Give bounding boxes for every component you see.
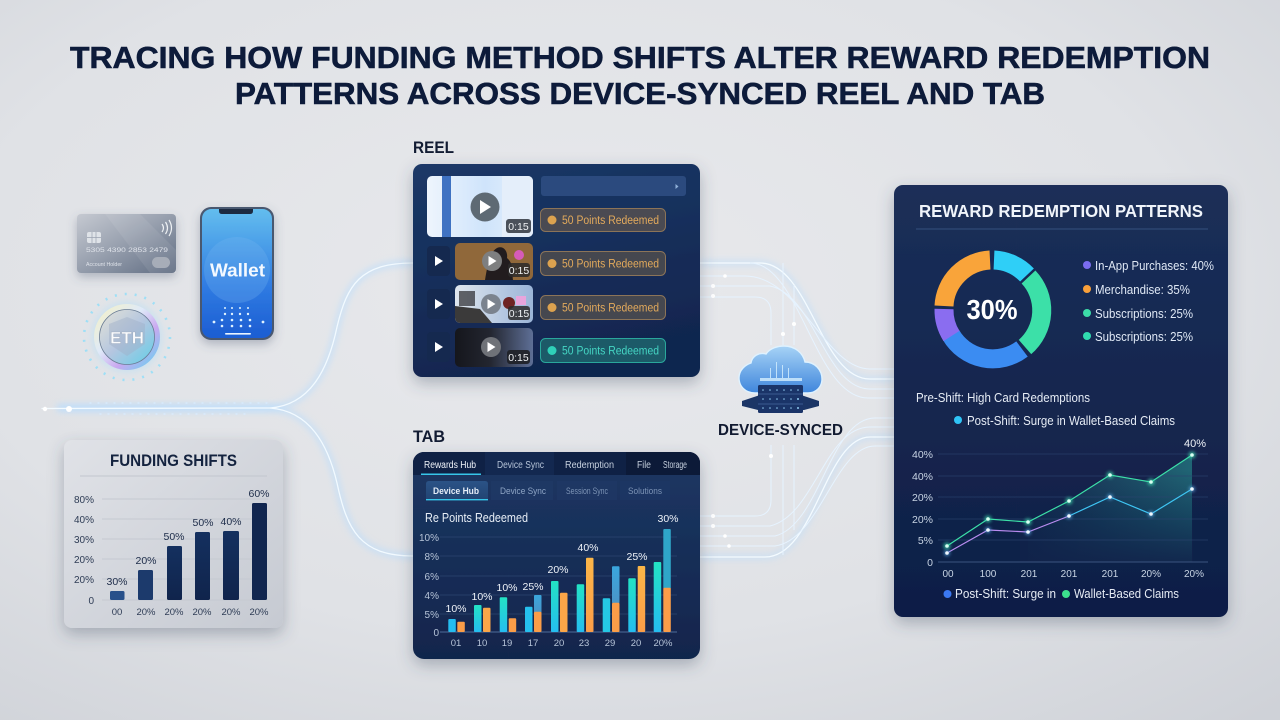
- legend: line chart: [944, 586, 1179, 601]
- bar chart: funding shifts: 20%: [74, 555, 94, 566]
- bar chart: funding shifts: 40%: [74, 515, 94, 526]
- bar chart: funding shifts: 0: [88, 596, 94, 607]
- row 3 play button: [427, 289, 450, 319]
- bar chart: funding shifts: 40%: [220, 516, 242, 528]
- tab navigation: Device Sync: [497, 460, 544, 471]
- panel: reward redemption patterns: [894, 185, 1228, 617]
- thumbnail: main video: 0:15: [508, 221, 529, 233]
- bar chart: points redeemed: 5%: [425, 610, 439, 621]
- title: TRACING HOW FUNDING METHOD SHIFTS ALTER REWARD REDEMPTION: [70, 40, 1210, 75]
- line chart: 5%: [918, 535, 933, 547]
- thumbnail: row 4: 0:15: [508, 352, 529, 364]
- line chart: 40%: [1184, 438, 1206, 450]
- bar chart: funding shifts: 20%: [74, 575, 94, 586]
- sub tabs: Device Hub: [433, 486, 479, 497]
- tab navigation: Rewards Hub: [424, 460, 476, 471]
- sub tabs: Solutions: [628, 486, 662, 497]
- bar chart: points redeemed: 8%: [425, 552, 439, 563]
- icon: bank card: 5305 4390 2853 2479: [86, 247, 168, 254]
- caption: pre-shift: Pre-Shift: High Card Redemptions: [916, 390, 1090, 405]
- legend: redemption categories: [1083, 258, 1214, 344]
- bar chart: points redeemed: 20: [631, 638, 641, 649]
- bar chart: points redeemed: 20%: [653, 638, 673, 649]
- legend: line chart: Post-Shift: Surge in: [955, 586, 1056, 601]
- badge: points row 3: 50 Points Redeemed: [562, 302, 659, 314]
- bar chart: funding shifts: [74, 488, 270, 618]
- bar chart: points redeemed: 4%: [425, 591, 439, 602]
- bar chart: funding shifts: 60%: [248, 488, 270, 500]
- line chart: [912, 438, 1208, 580]
- sub tabs: Session Sync: [566, 486, 608, 497]
- sub tabs: Device Sync: [500, 486, 546, 497]
- bar chart: points redeemed: 29: [605, 638, 615, 649]
- bar chart: funding shifts: 30%: [106, 576, 128, 588]
- bar chart: funding shifts: 50%: [163, 531, 185, 543]
- badge: points row 4: 50 Points Redeemed: [562, 346, 659, 358]
- donut chart: [944, 260, 1042, 359]
- bar chart: points redeemed: 6%: [425, 572, 439, 583]
- line chart: 40%: [912, 471, 933, 483]
- heading: tab: TAB: [413, 427, 445, 446]
- bar chart: points redeemed: 19: [502, 638, 512, 649]
- legend: redemption categories: In-App Purchases: 40%: [1095, 258, 1214, 273]
- row 2 play button: [427, 246, 450, 276]
- line chart: 201: [1061, 569, 1078, 580]
- bar chart: points redeemed: 01: [451, 638, 461, 649]
- bar chart: points redeemed: 10%: [496, 582, 518, 594]
- line chart: 20%: [912, 492, 933, 504]
- line chart: 201: [1102, 569, 1119, 580]
- bar chart: points redeemed: 20%: [547, 564, 569, 576]
- panel: funding shifts: [64, 440, 283, 628]
- bar chart: points redeemed: 17: [528, 638, 538, 649]
- bar chart: points redeemed: 20: [554, 638, 564, 649]
- thumbnail: row 2: 0:15: [509, 265, 529, 277]
- line chart: 20%: [1141, 569, 1161, 580]
- bar chart: funding shifts: 80%: [74, 495, 94, 506]
- title: [70, 40, 1210, 111]
- bar chart: points redeemed: 10%: [471, 591, 493, 603]
- line chart: 0: [927, 557, 933, 569]
- bar chart: points redeemed: 40%: [577, 542, 599, 554]
- line chart: 00: [942, 569, 954, 580]
- icon: bank card: [77, 214, 176, 273]
- heading: reward redemption patterns: REWARD REDEMPTION PATTERNS: [919, 201, 1203, 221]
- bar chart: points redeemed: 10: [477, 638, 487, 649]
- bar chart: points redeemed: 30%: [657, 513, 679, 525]
- icon: bank card: Account Holder: [86, 262, 122, 268]
- line chart: 100: [980, 569, 997, 580]
- badge: points row 2: 50 Points Redeemed: [562, 258, 659, 270]
- heading: funding shifts: FUNDING SHIFTS: [110, 451, 237, 470]
- caption: post-shift: Post-Shift: Surge in Wallet-Based Claims: [967, 413, 1175, 428]
- arrow: funding flow splitting to reel and tab: [42, 263, 413, 556]
- tab navigation: [413, 452, 700, 475]
- panel: reel: [413, 164, 700, 377]
- bar chart: points redeemed: 23: [579, 638, 589, 649]
- legend: redemption categories: Subscriptions: 25%: [1095, 329, 1193, 344]
- bar chart: funding shifts: 20%: [249, 607, 269, 618]
- line chart: 20%: [1184, 569, 1204, 580]
- icon: ETH coin: ETH: [110, 328, 144, 348]
- bar chart: funding shifts: 20%: [221, 607, 241, 618]
- bar chart: funding shifts: 30%: [74, 535, 94, 546]
- bar chart: points redeemed: 25%: [522, 581, 544, 593]
- bar chart: funding shifts: 20%: [164, 607, 184, 618]
- badge: points row 1: [540, 208, 666, 232]
- thumbnail: main video: [427, 176, 533, 237]
- legend: redemption categories: Merchandise: 35%: [1095, 282, 1190, 297]
- tab navigation: Redemption: [565, 460, 614, 471]
- badge: points row 4: [540, 338, 666, 362]
- tab navigation: File: [637, 460, 651, 471]
- bar chart: funding shifts: 20%: [136, 607, 156, 618]
- legend: redemption categories: Subscriptions: 25%: [1095, 306, 1193, 321]
- bar chart: points redeemed: 10%: [445, 603, 467, 615]
- thumbnail: row 2: [455, 243, 533, 280]
- sub tabs: [426, 481, 670, 500]
- bar chart: points redeemed: 10%: [419, 533, 439, 544]
- line chart: 20%: [912, 514, 933, 526]
- chart heading: Re Points Redeemed: [425, 510, 528, 525]
- badge: points row 2: [540, 252, 666, 276]
- title: PATTERNS ACROSS DEVICE-SYNCED REEL AND TAB: [235, 76, 1045, 111]
- legend: line chart: Wallet-Based Claims: [1074, 586, 1179, 601]
- icon: ETH coin: [84, 294, 170, 380]
- thumbnail: row 4: [455, 328, 533, 367]
- label: device-synced: DEVICE-SYNCED: [718, 422, 843, 439]
- bar chart: points redeemed: 0: [433, 628, 439, 639]
- panel: tab: [413, 452, 700, 659]
- bar chart: points redeemed: 25%: [626, 551, 648, 563]
- bar chart: funding shifts: 20%: [135, 555, 157, 567]
- bar chart: funding shifts: 00: [112, 607, 122, 618]
- icon: phone wallet: [200, 207, 274, 340]
- icon: cloud and server: [739, 346, 822, 413]
- line chart: 40%: [912, 449, 933, 461]
- thumbnail: row 3: [455, 285, 533, 323]
- search bar: [541, 176, 686, 196]
- line chart: 201: [1021, 569, 1038, 580]
- thumbnail: row 3: 0:15: [509, 308, 529, 320]
- icon: phone wallet: Wallet: [210, 260, 265, 280]
- heading: reel: REEL: [413, 138, 454, 157]
- row 4 play button: [427, 332, 450, 362]
- arrow: reel and tab flows into reward panel: [700, 263, 895, 557]
- tab navigation: Storage: [663, 460, 687, 471]
- donut value: 30%: [966, 294, 1018, 325]
- bar chart: funding shifts: 50%: [192, 517, 214, 529]
- badge: points row 3: [540, 296, 666, 320]
- bar chart: points redeemed: [419, 513, 679, 649]
- bar chart: funding shifts: 20%: [192, 607, 212, 618]
- badge: points row 1: 50 Points Redeemed: [562, 215, 659, 227]
